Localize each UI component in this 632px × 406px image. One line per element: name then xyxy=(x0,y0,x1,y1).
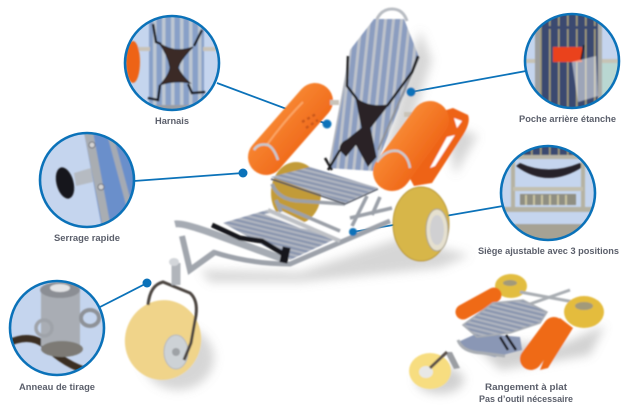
label: Pas d'outil nécessaire: Pas d’outil nécessaire xyxy=(479,394,573,404)
seat xyxy=(271,167,378,203)
right float xyxy=(400,108,469,186)
label: Serrage rapide: Serrage rapide xyxy=(54,233,120,243)
label: Harnais: Harnais xyxy=(155,116,189,126)
label: Siège ajustable: Siège ajustable avec 3 positions xyxy=(478,246,619,256)
seat frame xyxy=(272,184,392,231)
callout connector lines xyxy=(100,71,526,307)
label: Rangement à plat: Rangement à plat xyxy=(485,382,567,392)
left float xyxy=(266,101,315,157)
inset: Anneau de tirage xyxy=(5,281,104,375)
dot: seat xyxy=(349,228,357,236)
inset: Serrage rapide xyxy=(40,132,140,228)
front caster wheel xyxy=(116,292,210,388)
label: Anneau de tirage: Anneau de tirage xyxy=(19,382,95,392)
main product: beach wheelchair xyxy=(116,9,478,390)
front footrest frame xyxy=(223,210,333,260)
label: Poche arrière étanche: Poche arrière étanche xyxy=(519,114,616,124)
callout dot: pocket xyxy=(406,88,416,96)
backrest xyxy=(328,19,419,171)
backrest handle xyxy=(376,9,407,21)
footrest strap xyxy=(212,225,285,255)
inset: Harnais xyxy=(125,14,219,112)
folded chair photo xyxy=(409,274,605,394)
right wheel xyxy=(393,187,449,261)
shadows xyxy=(142,30,478,390)
rear left wheel xyxy=(271,162,321,224)
harness xyxy=(325,56,418,170)
callout dot: harness xyxy=(322,120,332,128)
inset: Poche arrière étanche xyxy=(524,12,624,112)
inset: Siège ajustable xyxy=(500,146,596,242)
